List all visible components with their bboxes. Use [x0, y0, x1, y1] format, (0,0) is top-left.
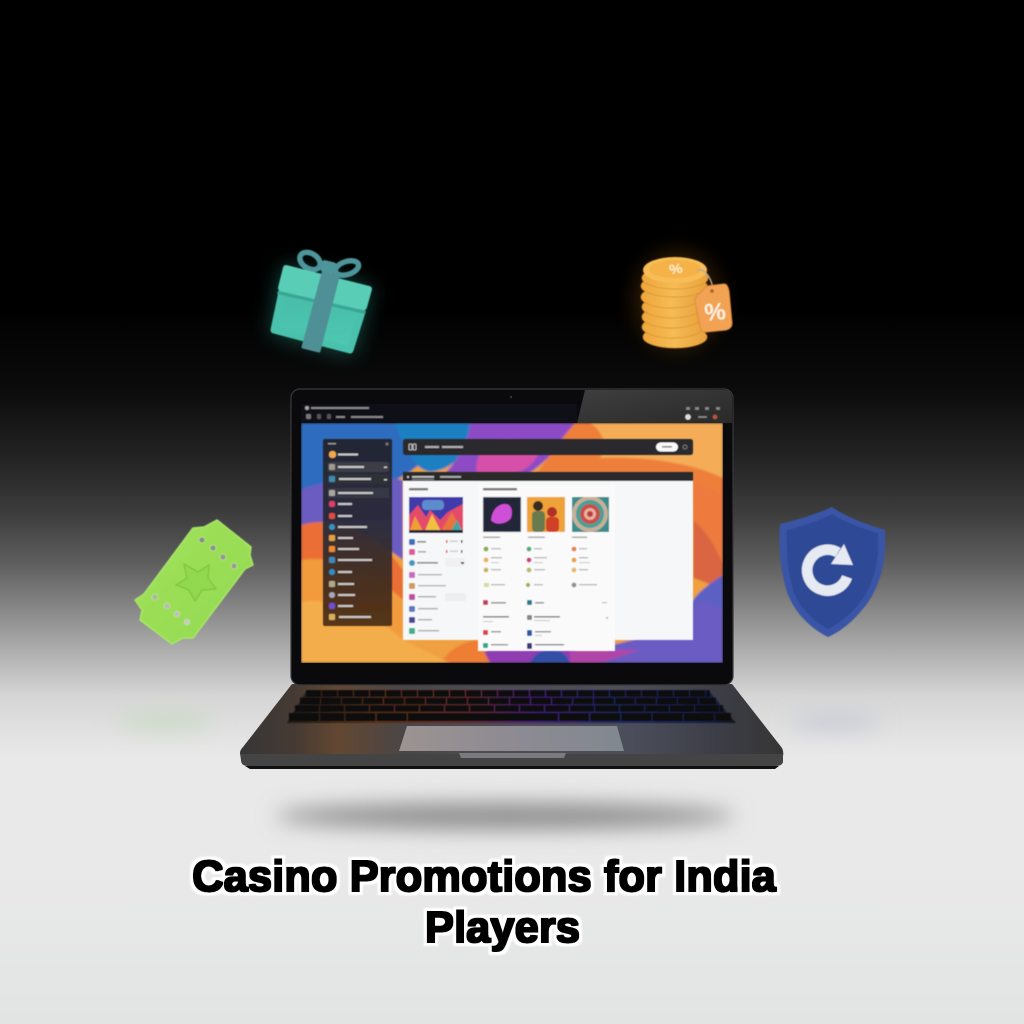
icon: coin stack with percent tag: % — [703, 298, 727, 327]
sidebar panel — [323, 439, 392, 626]
screen interface — [323, 439, 693, 651]
icon: coin stack with percent tag — [636, 252, 732, 348]
camera — [510, 396, 512, 398]
title: Players — [425, 904, 580, 952]
price tag — [695, 284, 732, 332]
ticket perforations — [152, 537, 237, 625]
floor shadow under ticket — [115, 716, 215, 726]
feature status rows — [484, 547, 597, 587]
game thumbnail: spiral rings — [572, 496, 609, 532]
card list rows — [483, 600, 608, 649]
shield outer — [779, 507, 885, 637]
gift lid — [281, 268, 369, 307]
laptop lid — [291, 389, 733, 685]
shield inner — [787, 514, 878, 629]
keyboard — [287, 690, 736, 723]
floor shadow under shield — [789, 717, 881, 727]
browser chrome — [301, 404, 720, 423]
trackpad — [399, 726, 624, 751]
top navigation bar — [403, 439, 693, 455]
laptop — [240, 389, 783, 769]
screen wallpaper — [301, 423, 723, 663]
hero image — [409, 497, 463, 533]
ticket body — [135, 520, 253, 644]
gift ribbon — [303, 273, 338, 351]
card heading — [483, 488, 517, 490]
gift bow — [297, 249, 360, 278]
game thumbnail: two characters — [527, 497, 565, 532]
main window — [403, 472, 693, 640]
refresh arrow — [807, 544, 853, 591]
gift body — [274, 292, 362, 350]
thumbnail captions — [483, 536, 587, 538]
icon: gift box — [270, 249, 372, 355]
sidebar menu labels — [338, 454, 373, 618]
top coin — [643, 257, 707, 283]
sidebar menu icons — [329, 451, 336, 620]
icon: blue shield with refresh arrow — [779, 507, 885, 637]
lid glare — [577, 390, 732, 423]
title: Casino Promotions for India — [192, 853, 777, 901]
icon: coin stack with percent tag: % — [668, 261, 684, 278]
notch — [459, 753, 566, 758]
floor shadow under laptop — [275, 803, 735, 829]
tag string — [697, 270, 713, 290]
game thumbnail: pink figure — [483, 497, 521, 532]
icon: green ticket — [135, 520, 253, 644]
ticket star — [176, 564, 216, 601]
games card — [478, 485, 615, 651]
coin stack — [641, 267, 708, 348]
laptop base — [240, 684, 783, 769]
left column heading — [409, 488, 428, 490]
left column rows — [409, 539, 466, 634]
